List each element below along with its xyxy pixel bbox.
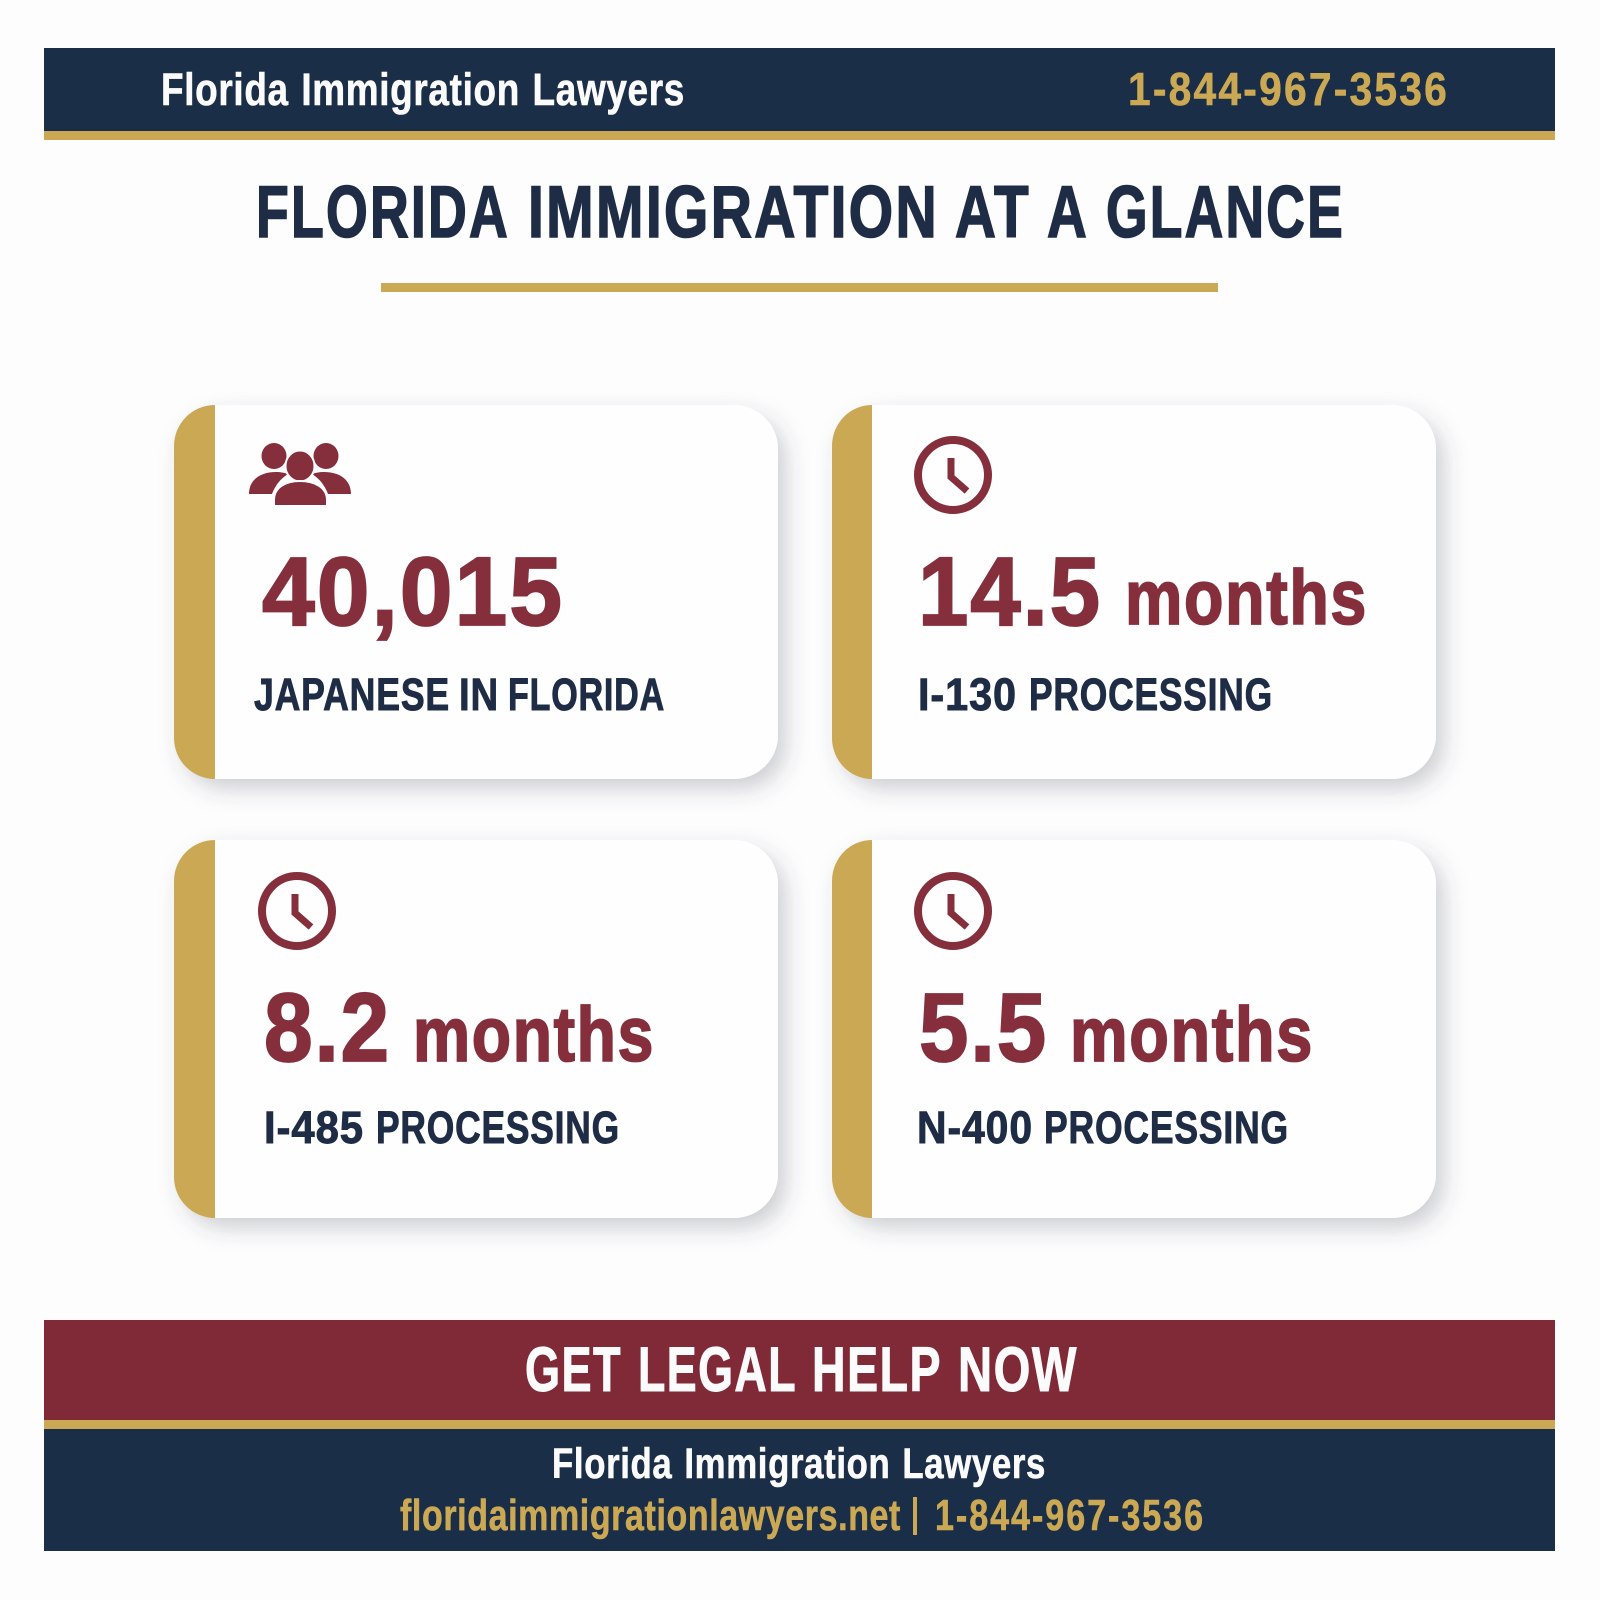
panel: N-400 processing <box>832 840 1436 1218</box>
label: I-130 processing: PROCESSING <box>1029 669 1273 720</box>
title: AT <box>955 172 1031 253</box>
label: Japanese in Florida: FLORIDA <box>508 669 665 720</box>
title: A <box>1047 172 1089 253</box>
label: Japanese in Florida <box>254 669 665 720</box>
label: N-400 processing: PROCESSING <box>1044 1102 1289 1153</box>
label: N-400 processing <box>917 1102 1289 1153</box>
label: I-485 processing <box>264 1102 620 1153</box>
title: IMMIGRATION <box>528 172 939 253</box>
call-to-action text: NOW <box>958 1335 1078 1405</box>
call-to-action text: HELP <box>812 1335 942 1405</box>
call-to-action text: LEGAL <box>638 1335 797 1405</box>
stat: 14.5 months <box>918 537 1368 646</box>
label: I-130 processing <box>918 669 1273 720</box>
header firm name: Florida Immigration Lawyers <box>161 64 685 115</box>
icon: clock <box>918 440 988 510</box>
call-to-action text <box>525 1335 1078 1405</box>
call-to-action band <box>44 1320 1555 1420</box>
panel: I-130 processing <box>832 405 1436 779</box>
header band <box>44 48 1555 140</box>
title <box>256 172 1345 253</box>
stat: 5.5 months: months <box>1070 992 1314 1078</box>
icon: clock <box>262 876 332 946</box>
header phone number: 1-844-967-3536 <box>1128 63 1449 115</box>
panel: Japanese in Florida <box>174 405 778 779</box>
title: GLANCE <box>1106 172 1345 253</box>
label: I-130 processing: I-130 <box>918 669 1017 720</box>
label: Japanese in Florida: JAPANESE <box>254 669 450 720</box>
footer band <box>44 1429 1555 1551</box>
footer firm name: Florida Immigration Lawyers <box>552 1440 1046 1488</box>
icon: people group <box>249 443 351 506</box>
label: I-485 processing: I-485 <box>264 1102 364 1153</box>
stat: 8.2 months: months <box>413 992 655 1078</box>
footer contact line: floridaimmigrationlawyers.net <box>400 1491 901 1540</box>
panel: I-485 processing <box>174 840 778 1218</box>
label: I-485 processing: PROCESSING <box>376 1102 620 1153</box>
gold divider band <box>44 1420 1555 1429</box>
title underline <box>381 283 1218 292</box>
stat: 14.5 months: 14.5 <box>918 537 1102 646</box>
label: Japanese in Florida: IN <box>459 669 499 720</box>
label: N-400 processing: N-400 <box>917 1102 1033 1153</box>
stat: 14.5 months: months <box>1125 555 1368 641</box>
footer contact line: 1-844-967-3536 <box>935 1491 1205 1540</box>
stat: 5.5 months: 5.5 <box>919 973 1048 1082</box>
call-to-action text: GET <box>525 1335 622 1405</box>
stat: 8.2 months: 8.2 <box>264 973 391 1082</box>
icon: clock <box>918 876 988 946</box>
stat: 40,015: 40,015 <box>262 537 564 646</box>
title: FLORIDA <box>256 172 510 253</box>
stat: 5.5 months <box>919 973 1314 1082</box>
stat: 8.2 months <box>264 973 655 1082</box>
